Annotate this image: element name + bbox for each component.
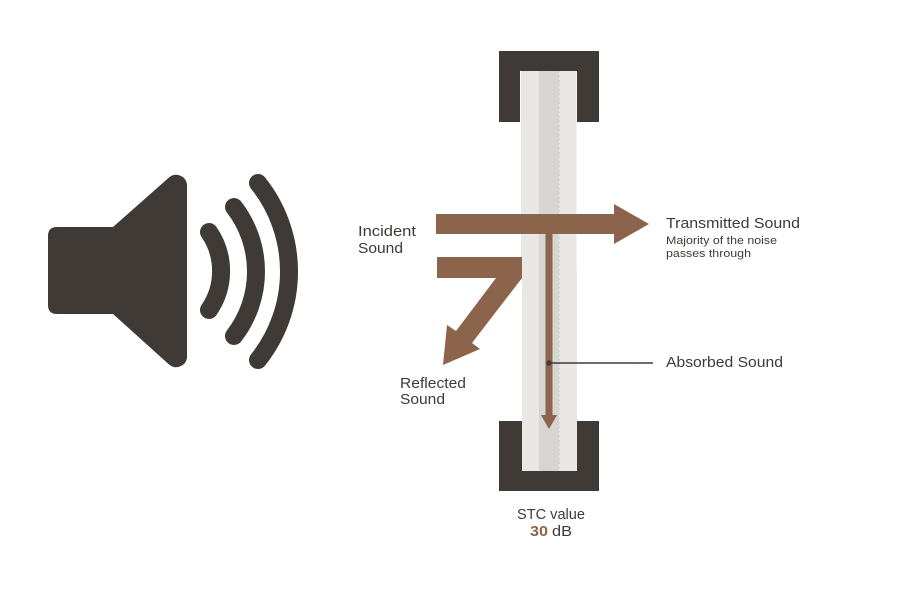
leader line: absorbed sound (546, 360, 653, 366)
arrow: reflected sound (437, 257, 522, 365)
label: STC value: STC value (517, 507, 585, 523)
label: 30 dB: dB (552, 524, 572, 540)
note: majority of the noise passes through: passes through (666, 248, 751, 260)
window frame: top (499, 51, 599, 122)
sound wave: medium (234, 207, 256, 336)
label: reflected sound: Reflected (400, 376, 466, 392)
arrow: transmitted sound (436, 204, 649, 244)
glass pane (521, 71, 577, 471)
label: absorbed sound: Absorbed Sound (666, 355, 783, 371)
label: 30 dB: 30 (530, 524, 548, 540)
label: incident sound: Sound (358, 241, 403, 257)
label: transmitted sound: Transmitted Sound (666, 216, 800, 232)
sound wave: large (258, 183, 289, 360)
arrow: absorbed sound (541, 234, 557, 429)
icon: speaker (48, 175, 289, 367)
sound wave: small (209, 232, 221, 310)
speaker body (48, 175, 187, 367)
window frame: bottom (499, 421, 599, 491)
note: majority of the noise passes through: Majority of the noise (666, 235, 777, 247)
label: reflected sound: Sound (400, 392, 445, 408)
label: incident sound: Incident (358, 224, 416, 240)
